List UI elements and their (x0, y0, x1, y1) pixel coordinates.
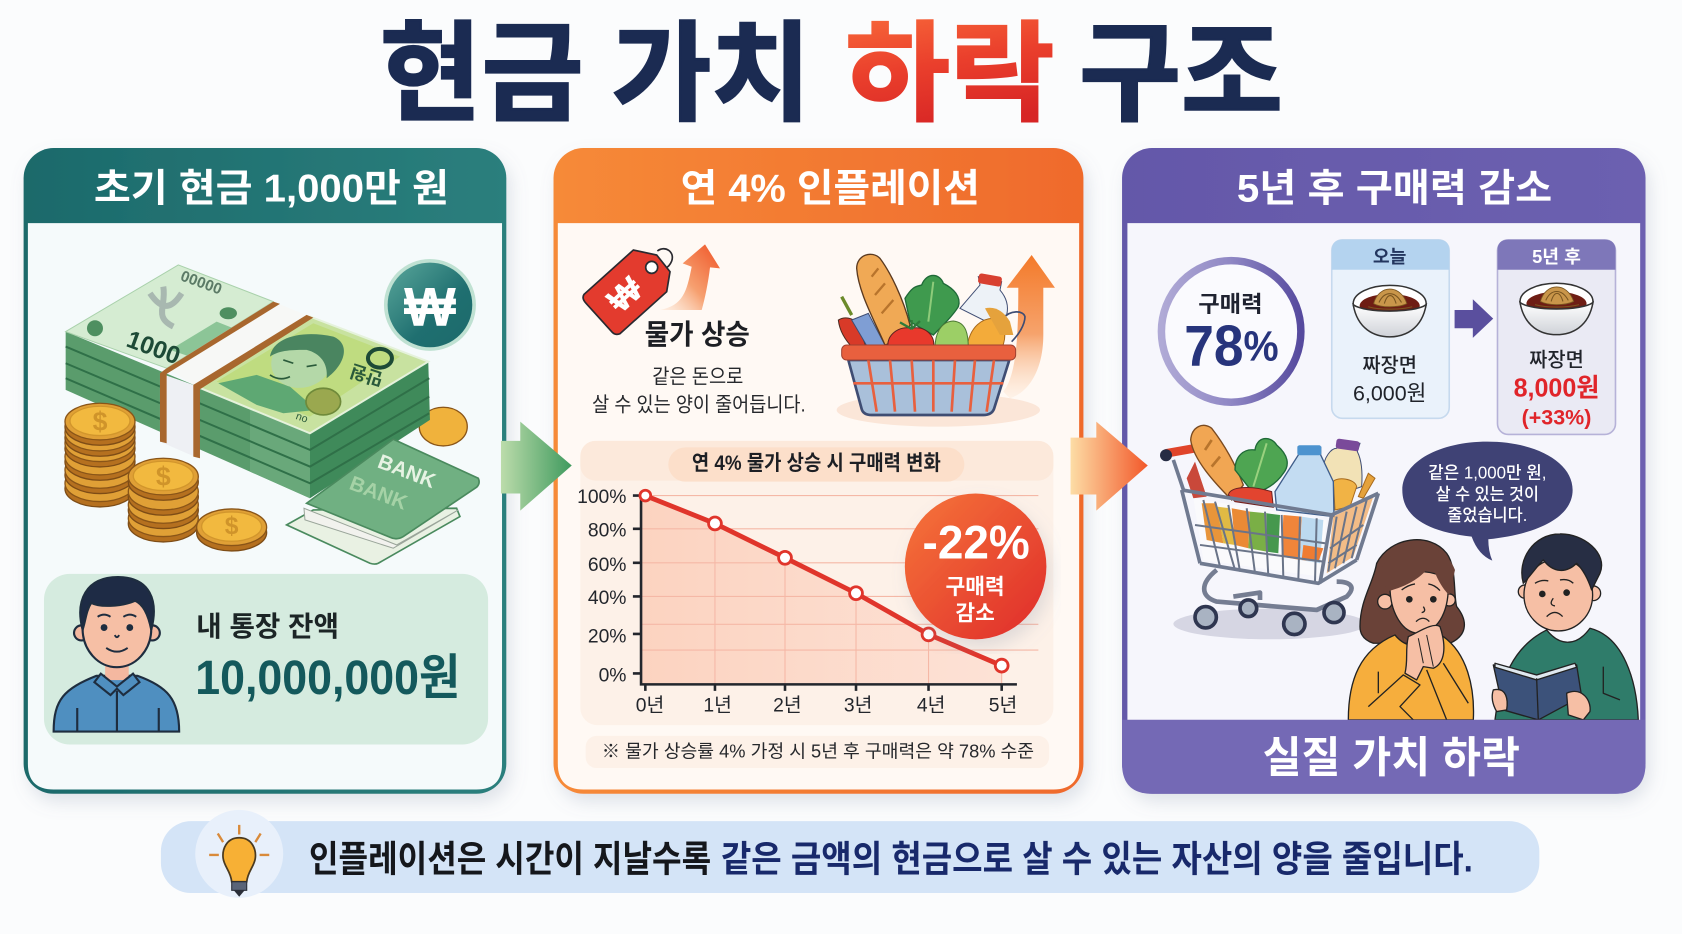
panel: purchasing power after 5 years (1122, 148, 1646, 794)
gauge: 78 percent: 78% (1184, 314, 1279, 378)
price rise label: 물가 상승 (645, 319, 750, 350)
title: 가치 (611, 14, 811, 135)
icon: grocery basket with rising arrow (837, 254, 1055, 427)
chart title pill: 연 4% 물가 상승 시 구매력 변화 (692, 452, 941, 475)
illustration: worried couple with speech bubble (1348, 442, 1638, 720)
line chart: purchasing power: 2년 (773, 694, 802, 716)
line chart: purchasing power: 1년 (703, 694, 732, 716)
panel: inflation (554, 148, 1083, 794)
line chart: purchasing power: 3년 (844, 694, 872, 716)
price rise description (592, 366, 806, 416)
icon: man (54, 577, 179, 732)
illustration: cash stack, coins and bankbook: ₩ (404, 276, 456, 338)
price rise description: 같은 돈으로 (652, 366, 743, 389)
illustration: cash stack, coins and bankbook: BANK (375, 450, 439, 493)
heading: purchasing power: 5년 후 구매력 감소 (1237, 167, 1552, 210)
speech bubble (1402, 442, 1573, 561)
title (380, 14, 1283, 135)
icon: price tag with rising arrow (583, 244, 720, 334)
takeaway text: 인플레이션은 시간이 지날수록 (309, 839, 711, 880)
arrow: cash to inflation (501, 422, 572, 511)
icon: light bulb (195, 810, 283, 898)
line chart: purchasing power (577, 487, 1038, 716)
footer band: real value falls: 실질 가치 하락 (1263, 734, 1520, 782)
illustration: shopping cart (1160, 425, 1378, 639)
speech bubble: 줄었습니다. (1447, 505, 1527, 525)
illustration: cash stack, coins and bankbook: BANK (346, 472, 410, 515)
illustration: cash stack, coins and bankbook (65, 259, 479, 564)
illustration: cash stack, coins and bankbook: $ (93, 407, 108, 437)
balance amount: 10,000,000원 (195, 651, 460, 705)
price card: after 5 years: 짜장면 (1529, 349, 1584, 371)
gauge: 78 percent (1161, 261, 1301, 402)
chart footnote (586, 736, 1049, 768)
gauge: 78 percent: 구매력 (1198, 292, 1263, 317)
takeaway text (309, 839, 1473, 880)
arrow: inflation to purchasing power (1071, 422, 1148, 511)
line chart: purchasing power: 100% (577, 487, 626, 508)
price card: after 5 years: 5년 후 (1532, 246, 1581, 267)
callout: minus 22 percent: -22% (923, 516, 1030, 569)
arrow: today to 5 years (1455, 299, 1493, 338)
title: 하락 (845, 14, 1054, 135)
callout: minus 22 percent: 감소 (955, 602, 995, 626)
line chart: purchasing power: 4년 (917, 694, 945, 716)
price card: after 5 years: 8,000원 (1514, 373, 1599, 402)
illustration: cash stack, coins and bankbook: $ (156, 462, 171, 492)
line chart: purchasing power: 40% (588, 588, 626, 609)
illustration: cash stack, coins and bankbook: $ (225, 513, 239, 540)
balance card (44, 574, 488, 744)
man (1492, 534, 1638, 720)
speech bubble: 같은 1,000만 원, (1428, 463, 1546, 483)
takeaway text: 같은 금액의 현금으로 살 수 있는 자산의 양을 줄입니다. (721, 839, 1473, 880)
callout: minus 22 percent: 구매력 (946, 575, 1005, 599)
chart footnote: ※ 물가 상승률 4% 가정 시 5년 후 구매력은 약 78% 수준 (602, 740, 1034, 761)
heading: inflation: 연 4% 인플레이션 (681, 167, 980, 210)
line chart: purchasing power: 80% (588, 520, 626, 541)
price card: today (1332, 240, 1449, 418)
illustration: cash stack, coins and bankbook: 만원 (348, 360, 385, 390)
price card: today: 짜장면 (1362, 355, 1417, 377)
illustration: cash stack, coins and bankbook: 1000 (123, 326, 184, 370)
title: 현금 (380, 14, 584, 135)
callout: minus 22 percent (905, 493, 1046, 639)
price card: after 5 years (1497, 240, 1615, 434)
footer band: real value falls (1122, 720, 1646, 794)
line chart: purchasing power: 60% (588, 555, 626, 576)
speech bubble: 살 수 있는 것이 (1436, 484, 1539, 504)
chart panel (577, 441, 1053, 725)
panel: initial cash (24, 148, 506, 794)
illustration: cash stack, coins and bankbook: 00000 (179, 266, 225, 297)
illustration: cash stack, coins and bankbook: ou (294, 411, 309, 426)
icon: price tag with rising arrow: ₩ (600, 269, 651, 321)
line chart: purchasing power: 5년 (989, 694, 1017, 716)
woman (1348, 540, 1474, 720)
price card: today: 오늘 (1373, 246, 1406, 267)
takeaway bar (161, 810, 1539, 898)
price card: after 5 years: (+33%) (1522, 405, 1591, 429)
balance label: 내 통장 잔액 (196, 611, 339, 642)
line chart: purchasing power: 0년 (636, 694, 664, 716)
line chart: purchasing power: 0% (599, 665, 626, 686)
line chart: purchasing power: 20% (588, 627, 626, 648)
title: 구조 (1079, 14, 1283, 135)
heading: initial cash: 초기 현금 1,000만 원 (94, 167, 449, 210)
price card: today: 6,000원 (1353, 382, 1426, 406)
price rise description: 살 수 있는 양이 줄어듭니다. (592, 393, 806, 416)
chart title pill (668, 447, 964, 482)
